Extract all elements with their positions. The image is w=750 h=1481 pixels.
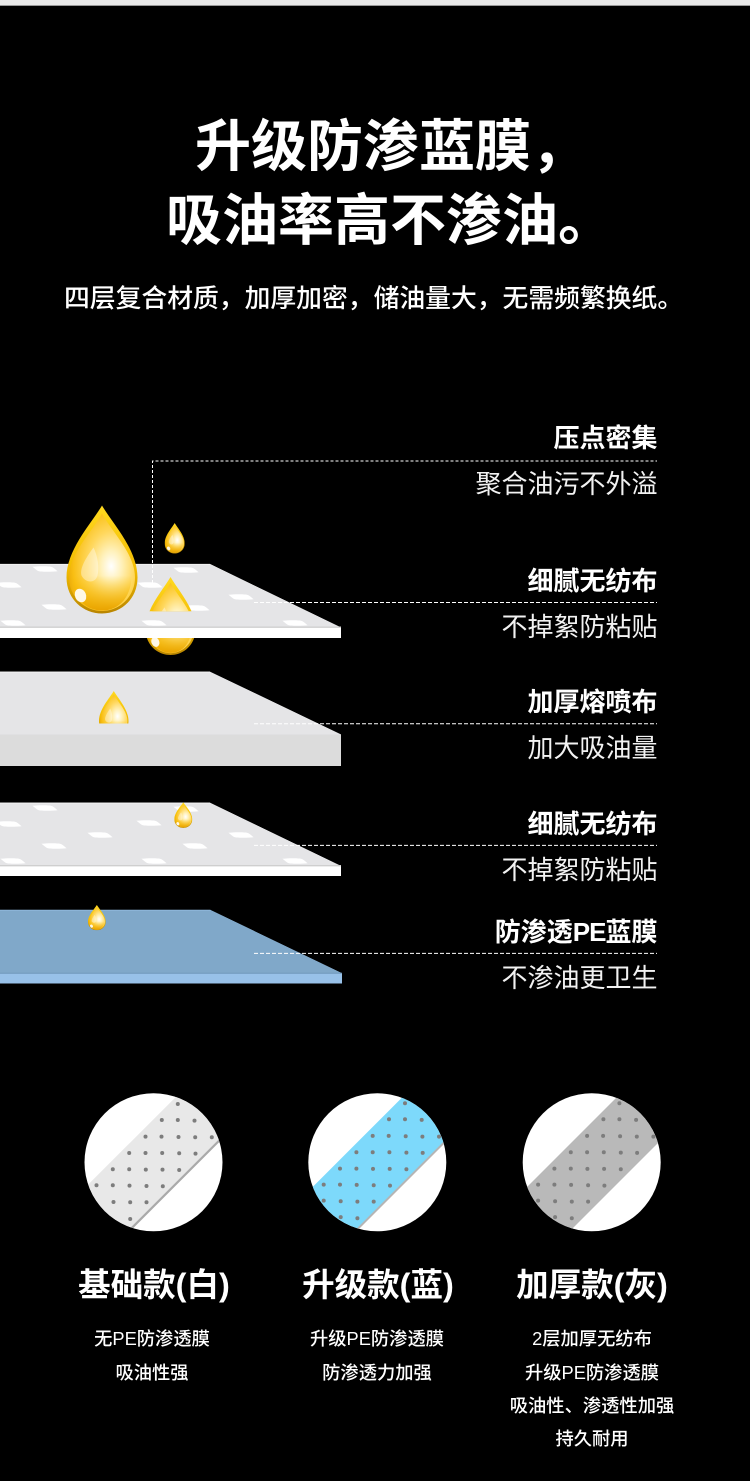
product text: grey line 2: 升级PE防渗透膜 (525, 1362, 659, 1383)
drop: on nonwoven 2 (174, 802, 192, 828)
title (166, 115, 614, 252)
drop: small above sheet (165, 523, 185, 554)
top light strip (0, 0, 750, 6)
layer 2: meltblown sheet (0, 672, 341, 766)
drop: large (66, 506, 138, 614)
product text: grey line 1: 2层加厚无纺布 (532, 1328, 652, 1349)
label text: meltblown: 加大吸油量 (527, 733, 658, 763)
label text: nonwoven 2: 不掉絮防粘贴 (501, 855, 658, 885)
callout line: nonwoven 2 (254, 844, 657, 846)
label: press points: 压点密集 (553, 423, 658, 453)
label text: PE film: 不渗油更卫生 (501, 963, 658, 993)
product text: white line 1: 无PE防渗透膜 (94, 1328, 210, 1349)
label text: nonwoven 1: 不掉絮防粘贴 (501, 612, 658, 642)
title: 吸油率高不渗油。 (166, 189, 614, 252)
layer diagram (0, 460, 657, 984)
product name: white: 基础款(白) (78, 1266, 230, 1302)
subtitle: 四层复合材质，加厚加密，储油量大，无需频繁换纸。 (64, 285, 683, 313)
layer 4: PE blue film (0, 910, 342, 984)
swatch: blue (308, 1093, 446, 1232)
callout line: press points (152, 461, 657, 583)
swatch: white (84, 1093, 222, 1232)
product text: grey line 3: 吸油性、渗透性加强 (510, 1395, 674, 1416)
product text: white line 2: 吸油性强 (115, 1362, 189, 1383)
layer 1: nonwoven sheet (0, 564, 341, 638)
swatch: grey (522, 1093, 661, 1232)
label text: press points: 聚合油污不外溢 (475, 469, 658, 499)
callout line: meltblown (254, 723, 657, 725)
label: PE film: 防渗透PE蓝膜 (495, 917, 658, 947)
layer 3: nonwoven sheet (0, 803, 341, 876)
callout line: nonwoven 1 (254, 602, 657, 604)
label: nonwoven 1: 细腻无纺布 (527, 566, 658, 596)
product text: blue line 1: 升级PE防渗透膜 (310, 1328, 444, 1349)
product swatches (84, 1093, 661, 1232)
drop: on top sheet upper part (150, 577, 192, 612)
drop: on meltblown (99, 691, 128, 724)
product name: blue: 升级款(蓝) (302, 1266, 454, 1302)
product text: blue line 2: 防渗透力加强 (322, 1362, 432, 1383)
label: nonwoven 2: 细腻无纺布 (527, 809, 658, 839)
product name: grey: 加厚款(灰) (516, 1266, 668, 1302)
title: 升级防渗蓝膜， (195, 115, 587, 178)
callout line: PE film (254, 952, 657, 954)
drop: falling through top sheet lower part (147, 638, 194, 655)
drop: on blue film (88, 905, 106, 930)
label: meltblown: 加厚熔喷布 (527, 687, 658, 717)
product text: grey line 4: 持久耐用 (555, 1428, 629, 1449)
